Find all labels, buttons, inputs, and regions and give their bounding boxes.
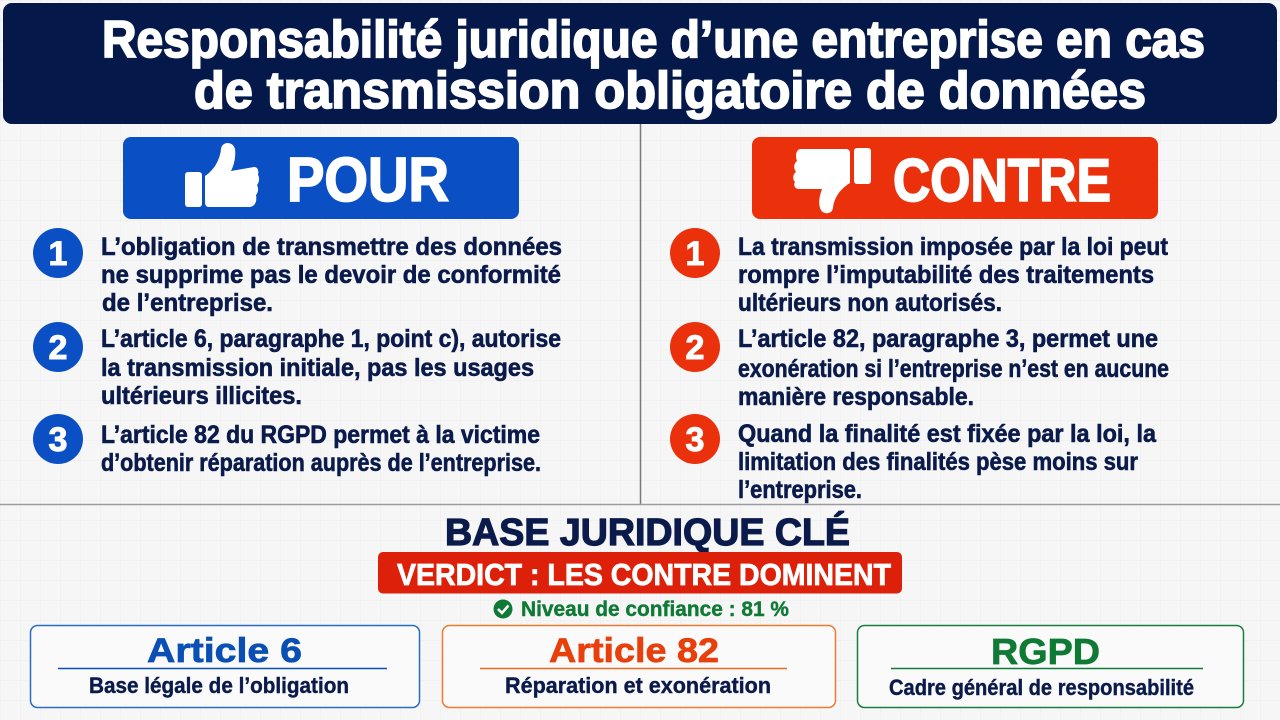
card: article 6 [30,626,420,708]
verdict banner: VERDICT : LES CONTRE DOMINENT [397,557,891,592]
title banner [3,3,1277,124]
title banner: Responsabilité juridique d’une entreprise en cas [102,11,1205,69]
contre item 1: ultérieurs non autorisés. [738,289,1002,317]
card: rgpd: Cadre général de responsabilité [889,675,1194,700]
pour header: POUR [287,146,449,215]
contre item 2: 2 [686,329,704,367]
contre item 1: La transmission imposée par la loi peut [738,233,1169,261]
pour item 1: ne supprime pas le devoir de conformité [101,261,561,289]
pour item 3: L’article 82 du RGPD permet à la victime [101,421,540,449]
card: article 6: Article 6 [147,632,302,670]
panel: pour [33,137,562,477]
pour item 3 [33,414,541,477]
card: article 82: Réparation et exonération [505,673,771,698]
icon: thumbs down [793,148,871,213]
pour item 1: L’obligation de transmettre des données [101,233,562,261]
contre item 3: l’entreprise. [738,476,862,504]
icon: thumbs up [185,143,259,207]
contre header [752,137,1158,219]
icon: check circle [494,600,512,618]
panel: contre [670,137,1169,504]
card: article 82: Article 82 [549,632,719,670]
contre item 1: rompre l’imputabilité des traitements [738,261,1154,289]
pour header [123,137,519,219]
contre header: CONTRE [893,147,1111,214]
card: article 6: Base légale de l’obligation [89,673,349,698]
card: rgpd: RGPD [991,631,1100,672]
contre item 1 [670,228,1169,317]
contre item 3: Quand la finalité est fixée par la loi, la [738,420,1157,448]
heading: base juridique clé: BASE JURIDIQUE CLÉ [445,510,850,554]
pour item 2 [33,322,561,410]
pour item 2: la transmission initiale, pas les usages [101,354,534,382]
contre item 2: L’article 82, paragraphe 3, permet une [738,325,1158,353]
pour item 3: d’obtenir réparation auprès de l’entreprise. [101,449,541,477]
pour item 2: 2 [49,329,67,367]
pour item 1 [33,228,562,317]
pour item 3: 3 [49,421,67,459]
pour item 2: L’article 6, paragraphe 1, point c), autorise [101,325,561,353]
contre item 2: exonération si l’entreprise n’est en aucune [738,355,1169,383]
pour item 1: 1 [49,235,67,273]
contre item 2: manière responsable. [738,383,974,411]
pour item 1: de l’entreprise. [102,289,273,317]
contre item 2 [670,322,1169,411]
contre item 1: 1 [686,235,704,273]
contre item 3: limitation des finalités pèse moins sur [738,448,1138,476]
title banner: de transmission obligatoire de données [194,62,1146,120]
confidence level: Niveau de confiance : 81 % [521,598,789,621]
contre item 3 [670,414,1157,504]
card: article 82 [442,626,836,708]
pour item 2: ultérieurs illicites. [101,382,302,410]
card: rgpd [858,626,1244,708]
contre item 3: 3 [686,421,704,459]
